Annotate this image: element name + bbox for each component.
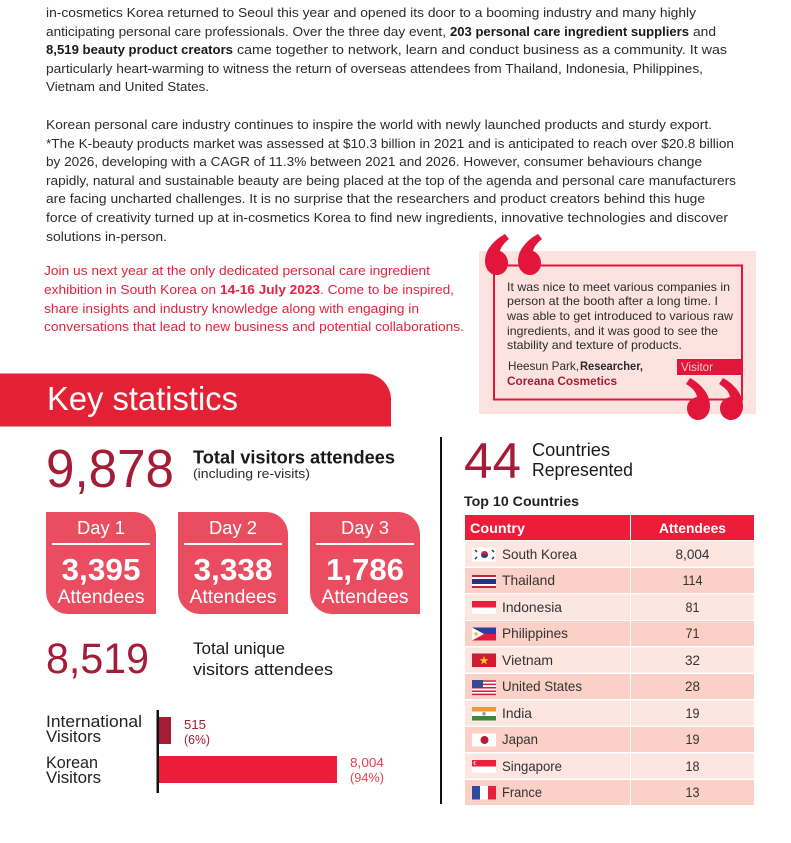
row: Indonesia: Indonesia [502, 599, 562, 615]
intro paragraph: in-cosmetics Korea returned to Seoul this year and opened its door to a booming industry and many highly [46, 5, 697, 20]
icon: flag of Philippines [472, 628, 496, 640]
row: Philippines [465, 621, 754, 646]
stat: total visitors: 9,878 [46, 439, 174, 499]
intro paragraph: anticipating personal care professionals. Over the three day event, [46, 24, 446, 39]
card: day 2: Day 2 [209, 518, 257, 538]
card: day 3: Day 3 [341, 518, 389, 538]
heading: top 10 countries: Top 10 Countries [464, 493, 579, 509]
icon: flag of Vietnam [472, 654, 496, 667]
row: Japan [465, 727, 754, 752]
stat: unique visitors: 8,519 [46, 635, 149, 683]
industry paragraph: solutions in-person. [46, 229, 167, 244]
value: korean [350, 755, 384, 785]
icon: flag of India [472, 707, 496, 720]
row: South Korea: 8,004 [676, 546, 710, 562]
quote attribution: Heesun Park, [508, 359, 579, 373]
bar chart: international vs korean visitors [46, 710, 384, 793]
intro paragraph: came together to network, learn and conduct business as a community. It was [237, 42, 728, 57]
row: Thailand: 114 [682, 572, 703, 588]
industry paragraph: rapidly, natural and sustainable beauty are being placed at the top of the agenda and personal care manufacturers [46, 173, 737, 188]
industry paragraph: *The K-beauty products market was assessed at $10.3 billion in 2021 and is anticipated to reach over $20.8 billion [46, 136, 734, 151]
card: day 1 [46, 512, 156, 614]
red invitation paragraph [44, 263, 464, 334]
red invitation paragraph: share insights and industry knowledge along with engaging in [44, 301, 419, 316]
row: Philippines: Philippines [502, 625, 568, 641]
row: United States [465, 674, 754, 699]
quote attribution [507, 359, 643, 388]
row: Vietnam: Vietnam [502, 652, 553, 668]
icon: flag of Thailand [472, 575, 496, 588]
quote attribution: Researcher, [580, 359, 643, 373]
row: Singapore: Singapore [502, 758, 562, 774]
icon: flag of France [472, 786, 496, 800]
icon: flag of South Korea [472, 548, 496, 562]
table: top 10 countries [465, 515, 754, 805]
card: day 3 [310, 512, 420, 614]
stat: total visitors [46, 439, 395, 499]
icon: closing quote marks [686, 378, 743, 420]
quote text: ingredients, and it was good to see the [507, 324, 718, 338]
value: international: (6%) [184, 732, 210, 747]
card: day 2: Attendees [190, 587, 276, 608]
row: Vietnam [465, 648, 754, 672]
row: Vietnam: 32 [685, 652, 700, 668]
intro paragraph: Vietnam and United States. [46, 79, 209, 94]
label: international visitors: International [46, 713, 142, 731]
visitor tag [677, 359, 742, 375]
card: day 1: 3,395 [62, 552, 140, 587]
value: korean: (94%) [350, 770, 384, 785]
row: United States: United States [502, 678, 582, 694]
row: South Korea [465, 541, 754, 566]
bar: korean [159, 756, 337, 783]
quote text: was able to get introduced to various raw [506, 309, 733, 323]
row: Philippines: 71 [686, 625, 700, 641]
card: day 3: 1,786 [326, 552, 404, 587]
row: India [465, 700, 754, 726]
row: France: 13 [686, 784, 700, 800]
table header: Attendees [659, 521, 726, 536]
row: Indonesia [465, 594, 754, 620]
row: France [465, 780, 754, 805]
row: Singapore: 18 [686, 758, 700, 774]
label: international visitors: Visitors [46, 728, 101, 746]
heading banner: key statistics [0, 374, 391, 426]
intro paragraph: 203 personal care ingredient suppliers [450, 24, 689, 39]
stat: unique visitors: Total unique [193, 640, 285, 658]
card: day 2: 3,338 [194, 552, 272, 587]
stat: countries represented: Represented [532, 460, 633, 480]
card: day 1: Day 1 [77, 518, 125, 538]
industry paragraph: force of creativity turned up at in-cosmetics Korea to find new ingredients, innovative technologies and discover [46, 210, 729, 225]
industry paragraph: Korean personal care industry continues to inspire the world with newly launched products and sturdy export. [46, 117, 712, 132]
row: South Korea: South Korea [502, 546, 577, 562]
bar: international [159, 717, 171, 744]
visitor tag: Visitor [681, 362, 713, 374]
row: United States: 28 [685, 678, 700, 694]
quote text: person at the booth after a long time. I [507, 294, 718, 308]
card: day 2 [178, 512, 288, 614]
icon: flag of Singapore [472, 760, 496, 773]
stat: total visitors: Total visitors attendees [193, 448, 395, 468]
stat: total visitors: (including re-visits) [193, 466, 310, 481]
icon: flag of Indonesia [472, 601, 496, 614]
row: Thailand: Thailand [502, 572, 555, 588]
label: international visitors [46, 713, 142, 746]
quote attribution: Coreana Cosmetics [507, 374, 617, 388]
industry paragraph [46, 117, 737, 244]
row: Singapore [465, 754, 754, 778]
stat: unique visitors: visitors attendees [193, 661, 333, 679]
row: Thailand [465, 568, 754, 593]
red invitation paragraph: Join us next year at the only dedicated personal care ingredient [44, 263, 430, 278]
label: korean visitors: Visitors [46, 769, 101, 787]
heading banner: key statistics: Key statistics [47, 380, 238, 417]
intro paragraph: and [693, 24, 716, 39]
label: korean visitors: Korean [46, 754, 98, 772]
red invitation paragraph: exhibition in South Korea on [44, 282, 216, 297]
intro paragraph: particularly heart-warming to witness the return of overseas attendees from Thailand, Indonesia, Philippines, [46, 61, 703, 76]
stat: countries represented: Countries [532, 440, 610, 460]
stat: unique visitors [46, 635, 333, 683]
value: korean: 8,004 [350, 755, 384, 770]
icon: flag of United States [472, 680, 496, 695]
axis [156, 710, 159, 793]
row: India: 19 [686, 705, 700, 721]
red invitation paragraph: . Come to be inspired, [320, 282, 454, 297]
quote text: It was nice to meet various companies in [507, 280, 730, 294]
intro paragraph [46, 5, 728, 94]
card: day 1: Attendees [58, 587, 144, 608]
label: korean visitors [46, 754, 101, 787]
stat: countries represented [464, 433, 633, 489]
stat: countries represented: 44 [464, 433, 521, 489]
panel: visitor testimonial [479, 234, 756, 420]
row: France: France [502, 784, 542, 800]
card: day 3: Attendees [322, 587, 408, 608]
row: India: India [502, 705, 532, 721]
table header: Country [470, 521, 526, 536]
value: international [184, 717, 210, 747]
icon: opening quote marks [485, 234, 542, 275]
quote text [506, 280, 733, 352]
red invitation paragraph: 14-16 July 2023 [220, 282, 320, 297]
row: Japan: Japan [502, 731, 538, 747]
industry paragraph: are facing uncharted challenges. It is no surprise that the researchers and product creators behind this huge [46, 191, 705, 206]
intro paragraph: 8,519 beauty product creators [46, 42, 233, 57]
row: Indonesia: 81 [686, 599, 700, 615]
value: international: 515 [184, 717, 206, 732]
industry paragraph: by 2026, developing with a CAGR of 11.3% between 2021 and 2026. However, consumer behaviours change [46, 154, 702, 169]
row: Japan: 19 [686, 731, 700, 747]
red invitation paragraph: conversations that lead to new business and potential collaborations. [44, 319, 464, 334]
icon: flag of Japan [472, 734, 496, 746]
table header [465, 515, 754, 540]
quote text: stability and texture of products. [507, 338, 682, 352]
